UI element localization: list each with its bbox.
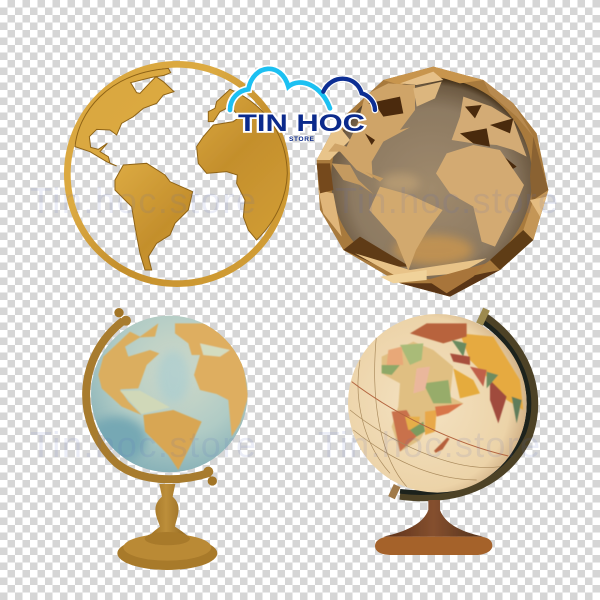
North America dark creases: [365, 97, 403, 145]
ocean wash: [87, 350, 190, 463]
stand arc: [86, 321, 210, 479]
map regions: [382, 323, 523, 452]
pedestal: [383, 500, 483, 537]
graticule lines: [350, 333, 500, 487]
watermark: top left: Tin.hoc.store: [30, 180, 256, 221]
icon: antique political globe: [348, 308, 534, 555]
Europe and Africa: [197, 89, 287, 240]
icon: watercolor globe on brass stand: [86, 308, 248, 570]
North America: [328, 83, 415, 178]
land masses: [98, 323, 248, 470]
Africa: [436, 145, 524, 247]
watermark: top right: Tin.hoc.store: [335, 180, 558, 221]
North America: [75, 68, 174, 166]
globe sphere: [91, 316, 248, 472]
South America: [115, 163, 193, 270]
faceted outer shell: [317, 67, 548, 297]
Greenland: [413, 82, 442, 107]
base: [117, 537, 217, 570]
logo clouds: [230, 69, 375, 110]
watermark: bottom right: Tin.hoc.store: [318, 424, 540, 465]
Eurasia: [452, 97, 527, 157]
logo store label: STORE: [289, 136, 315, 143]
icon: faceted paper globe: [317, 67, 548, 297]
pedestal: [145, 484, 192, 543]
sphere: [331, 78, 532, 279]
shell facets: [317, 67, 548, 297]
base: [375, 537, 492, 555]
globe ring: [67, 64, 287, 284]
icon: gold outline globe: [67, 64, 287, 284]
logo wordmark: TIN HOC: [238, 110, 365, 137]
Eurasia dark creases: [460, 105, 517, 172]
glow: [380, 173, 473, 265]
finials: [114, 308, 124, 317]
meridian arc stand: [400, 317, 534, 497]
equator line: [352, 382, 508, 456]
Central America: [332, 163, 383, 194]
sphere: [348, 314, 527, 493]
logo: Tin Hoc Store: [230, 69, 375, 143]
axis pins: [476, 308, 490, 326]
watermark: bottom left: Tin.hoc.store: [30, 424, 256, 465]
South America: [369, 187, 443, 271]
